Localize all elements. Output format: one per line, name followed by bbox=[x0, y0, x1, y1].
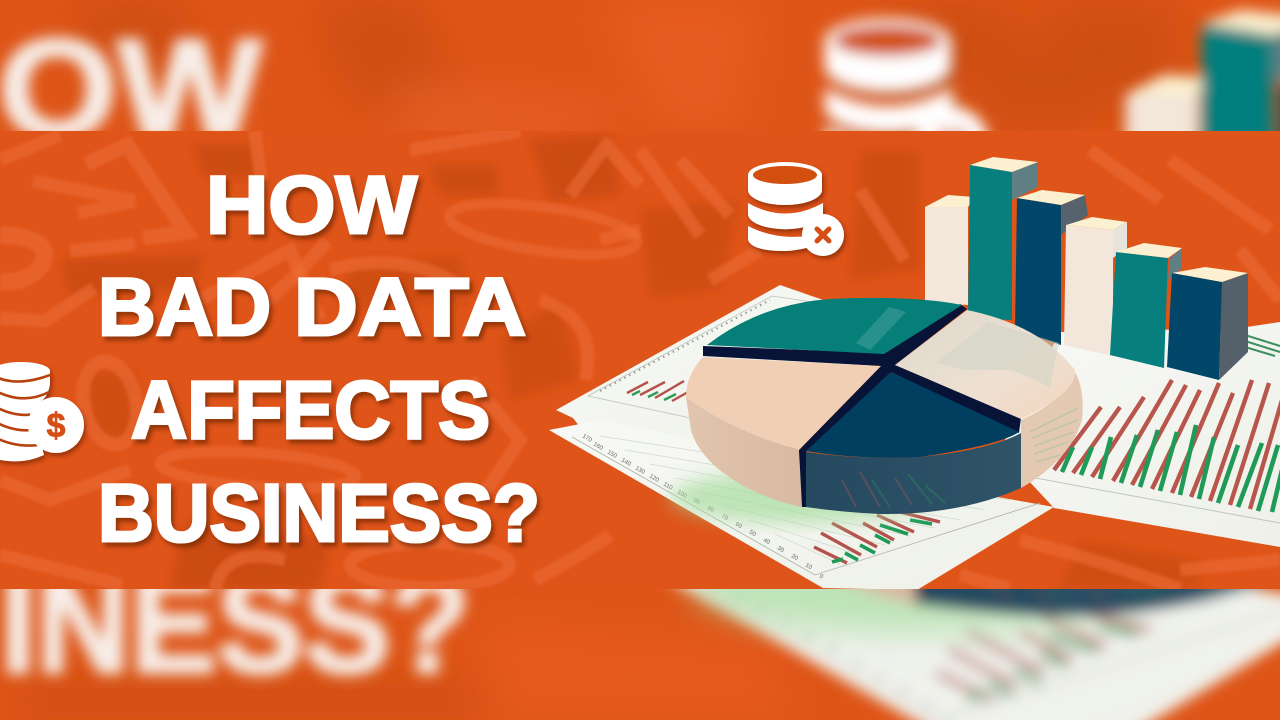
paper axis numbers bbox=[581, 434, 824, 581]
column 2 bbox=[968, 157, 1038, 320]
paper axis numbers: 130 bbox=[634, 466, 646, 476]
pie chart bbox=[686, 298, 1083, 514]
paper axis numbers: 50 bbox=[748, 530, 757, 538]
icon: database with x mark bbox=[748, 162, 844, 256]
paper axis numbers: 80 bbox=[706, 506, 715, 514]
title: BUSINESS? bbox=[98, 468, 540, 559]
pie: right side streaks bbox=[1030, 408, 1078, 462]
column 3 bbox=[1015, 190, 1088, 345]
green glow under pie bbox=[670, 471, 930, 523]
paper axis numbers: 140 bbox=[620, 458, 632, 468]
paper axis numbers: 110 bbox=[662, 482, 674, 492]
paper: upper left sheet bbox=[556, 285, 872, 446]
pie: right cream slice bbox=[895, 310, 1075, 419]
paper axis numbers: 70 bbox=[720, 514, 729, 522]
blurred enlarged title fragments bbox=[0, 10, 470, 702]
blurred enlarged title fragments: INESS? bbox=[0, 545, 470, 702]
column 6 bbox=[1167, 267, 1248, 380]
paper axis numbers: 20 bbox=[790, 554, 799, 562]
paper axis numbers: 10 bbox=[804, 563, 813, 571]
title: BAD bbox=[98, 262, 271, 353]
pie: navy side bbox=[806, 433, 1021, 514]
title: HOW bbox=[206, 160, 418, 251]
paper axis numbers: 60 bbox=[734, 522, 743, 530]
pie: dark slice gaps bbox=[703, 304, 1021, 507]
panel: main banner bbox=[0, 131, 1280, 590]
pie: left cream side bbox=[686, 397, 802, 507]
paper axis numbers: 170 bbox=[581, 434, 593, 444]
paper axis numbers: 40 bbox=[762, 538, 771, 546]
pie: teal reflection bbox=[856, 307, 906, 350]
title: AFFECTS bbox=[131, 365, 490, 456]
paper axis numbers: 120 bbox=[648, 474, 660, 484]
bar chart: 3D columns bbox=[925, 157, 1248, 380]
column 5 bbox=[1110, 243, 1182, 368]
paper axis numbers: 100 bbox=[676, 490, 688, 500]
paper axis numbers: 30 bbox=[776, 546, 785, 554]
icon: coin stack with dollar sign bbox=[0, 362, 84, 461]
paper axis numbers: 160 bbox=[592, 442, 604, 452]
column 1 bbox=[925, 195, 975, 305]
paper axis numbers: 0 bbox=[818, 574, 824, 581]
title: DATA bbox=[294, 262, 526, 353]
paper: lower left sheet with chart bbox=[549, 420, 1054, 590]
pie: teal slice bbox=[707, 298, 962, 354]
illustration: papers, bars, pie chart and database icon bbox=[549, 157, 1280, 590]
paper axis numbers: 150 bbox=[606, 450, 618, 460]
pie: right cream side bbox=[1021, 372, 1083, 488]
pie: cream reflection bbox=[936, 322, 1059, 387]
pie: navy slice bbox=[806, 372, 1019, 458]
pie: left cream slice bbox=[686, 357, 881, 450]
pie: navy side reflection bbox=[842, 472, 945, 507]
column 4 bbox=[1064, 217, 1127, 356]
blurred enlarged title fragments: OW bbox=[0, 10, 262, 167]
title bbox=[98, 160, 540, 559]
paper axis numbers: 90 bbox=[692, 498, 701, 506]
paper: right sheet with bar chart bbox=[1000, 322, 1280, 547]
icon: coin stack with dollar sign: $ bbox=[47, 407, 66, 445]
